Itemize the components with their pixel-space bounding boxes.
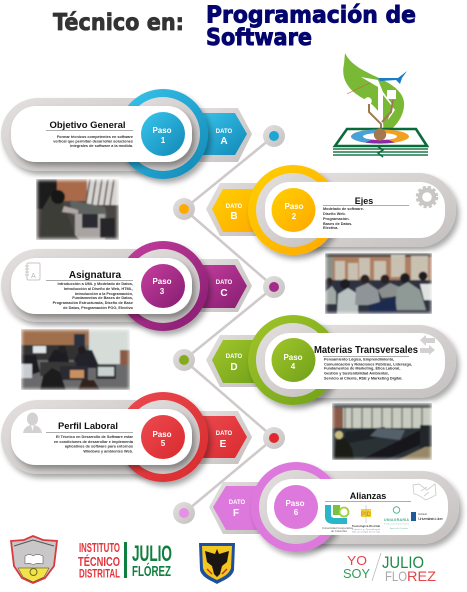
data tag F: DATO (229, 500, 246, 506)
heading and text: Formar técnicos competentes en software (57, 135, 133, 139)
heading and text: Bases de Datos. (323, 222, 352, 226)
panel: Paso 4 Materias Transversales (206, 315, 456, 405)
logo: Universitaria Lúker: Universitaria Lúker (418, 516, 444, 521)
logo: Instituto Técnico Distrital Julio Flórez (78, 540, 172, 580)
node B (173, 198, 195, 220)
node D (173, 349, 195, 371)
logo: Universidad Cooperativa: de Colombia (331, 529, 347, 533)
step circle 2: Paso (284, 202, 304, 211)
panel: Paso 1 Objetivo General (1, 89, 252, 179)
photo: classroom with curtains (332, 403, 432, 460)
step circle 1: 1 (161, 136, 166, 145)
data tag E: E (220, 439, 227, 450)
photo 2 soft edge (325, 253, 432, 314)
data tag C: DATO (216, 280, 233, 286)
panel: Paso 6 Alianzas (209, 462, 459, 552)
data tag C (195, 259, 252, 312)
heading (325, 491, 411, 502)
heading and text: Asignatura (69, 270, 122, 281)
data tag D (206, 335, 265, 387)
heading and text: Perfil Laboral (58, 421, 118, 431)
logo: Yo soy Julio Flórez: SOY (343, 566, 370, 581)
heading and text: Electiva. (323, 226, 338, 230)
logo: Instituto Técnico Distrital Julio Flórez: INSTITUTO (79, 540, 120, 555)
panel: Paso 2 Ejes (206, 165, 456, 255)
heading and text: aplicativos de software para entornos (65, 444, 133, 448)
logo: PID (352, 505, 381, 534)
panel: Paso 5 Perfil Laboral (1, 392, 252, 482)
heading and text (46, 270, 134, 310)
logo: Universidad Cooperativa (322, 505, 353, 533)
heading and text: en condiciones de desarrollar e implementa (54, 440, 134, 444)
data tag E (195, 411, 252, 464)
logo: Yo soy Julio Flórez (343, 553, 436, 584)
title: Programación de Software (206, 0, 416, 51)
heading and text (46, 120, 133, 148)
heading and text: Objetivo General (50, 120, 126, 130)
step circle 3 (141, 264, 185, 308)
heading and text: vertical que permitan desarrollar soluciones (53, 140, 133, 144)
step circle 6: Paso (285, 499, 305, 508)
node A (263, 125, 285, 147)
logo: PID: PID (361, 512, 372, 518)
step circle 6 (274, 485, 318, 529)
heading and text: Diseño Web. (323, 212, 346, 216)
node F (173, 502, 195, 524)
heading: Alianzas (350, 491, 386, 501)
data tag B: B (230, 211, 238, 222)
heading and text: Programación. (323, 217, 350, 221)
logo: Bogotá coat of arms (199, 543, 235, 584)
logo: Instituto Técnico Distrital Julio Flórez: JULIO (132, 541, 172, 566)
connector lines between nodes (184, 136, 274, 513)
logo: Yo soy Julio Flórez: YO (347, 553, 367, 568)
icon: gear (417, 187, 437, 207)
title: Programación de Software: Programación de (206, 0, 416, 28)
photo 1 soft edge (36, 179, 119, 240)
heading and text: Ejes (355, 196, 373, 206)
heading and text: Pensamiento Lógico, Emprendimiento, (324, 358, 394, 362)
title: Técnico en: Técnico en: (53, 10, 184, 36)
step circle 4: 4 (291, 362, 296, 371)
heading and text: Modelado de software. (323, 207, 364, 211)
icon: handshake (413, 484, 436, 500)
node C (263, 276, 285, 298)
logo: Instituto Técnico Distrital Julio Flórez: DISTRITAL (79, 566, 120, 580)
heading and text: Introducción a UML y Modelado de Datos, (58, 282, 133, 286)
step circle 2 (272, 188, 316, 232)
step circle 6: 6 (294, 508, 299, 517)
step circle 3: Paso (152, 277, 172, 286)
logo: Instituto Técnico Distrital Julio Flórez: FLÓREZ (132, 562, 171, 580)
icon: notebook (25, 263, 40, 280)
step circle 5: 5 (161, 439, 166, 448)
heading and text: Fundamentos de Bases de Datos, (72, 296, 133, 300)
logo: Universidad Cooperativa: Universidad Cooperativa (322, 526, 353, 530)
data tag B (206, 183, 265, 236)
heading and text (323, 196, 409, 230)
icon: arrows (420, 335, 435, 355)
data tag E: DATO (216, 431, 233, 437)
data tag B: DATO (226, 204, 243, 210)
logo: PID: Universidad Distrital (352, 530, 380, 534)
heading and text: de Datos, Programación POO, Electivo (63, 306, 134, 310)
heading and text: Windows y ambientes Web. (83, 450, 133, 454)
data tag D: DATO (226, 354, 243, 360)
heading and text: Programación Estructurada, Diseño de Base (53, 301, 133, 305)
panel: Paso 3 Asignatura (1, 241, 252, 331)
logo: Instituto Técnico Distrital Julio Flórez: TÉCNICO (78, 554, 120, 569)
step circle 4: Paso (283, 353, 303, 362)
heading and text: Gestión y Sostenibilidad Ambiental, (324, 372, 389, 376)
heading and text: Comunicación y Relaciones Públicas, Liderazgo, (324, 362, 412, 366)
heading and text: Introducción al Diseño de Web, HTML, (64, 287, 133, 291)
heading and text: Materias Transversales (314, 345, 418, 356)
step circle 4 (272, 338, 316, 382)
data tag F: F (233, 508, 239, 519)
step circle 1 (141, 112, 185, 156)
data tag F (209, 482, 268, 534)
logo: Yo soy Julio Flórez: FLO (385, 568, 407, 584)
photo: student at computer (36, 179, 119, 240)
heading and text (314, 345, 418, 380)
logo: Uniagraria: Fundación Universitaria (384, 522, 410, 526)
logo: Yo soy Julio Flórez: JULIO (382, 553, 424, 572)
logo: leaf, USB tree and banknote (333, 53, 428, 157)
logo: Universitaria Lúker (411, 512, 444, 521)
logo: Universitaria Lúker: Instituto (418, 512, 428, 516)
photo 4 soft edge (332, 403, 432, 460)
logo: Uniagraria: Agraria de Colombia (390, 527, 409, 530)
heading and text: Fundamentos de Marketing, Ética Laboral, (324, 366, 400, 370)
step circle 5: Paso (152, 430, 172, 439)
heading and text: Servicio al Cliente, RSE y Marketing Digital. (324, 376, 402, 380)
photo: students in classroom (325, 253, 432, 314)
photo: computer lab (21, 329, 130, 390)
data tag C: C (220, 288, 228, 299)
logo: Uniagraria: UNIAGRARIA (384, 518, 409, 522)
title: Programación de Software: Software (206, 23, 312, 51)
heading and text: integrales de software a la medida. (70, 144, 133, 148)
step circle 2: 2 (292, 212, 297, 221)
node E (263, 427, 285, 449)
data tag A (195, 108, 252, 162)
logo: PID: Tecnológica Distrital (352, 524, 380, 528)
logo: PID: Ciencia y Tecnología (352, 529, 381, 531)
photo 3 soft edge (21, 329, 130, 390)
heading and text: Introducción a la Programación, (75, 292, 133, 296)
heading and text: El Técnico en Desarrollo de Software estar (56, 435, 134, 439)
step circle 5 (141, 415, 185, 459)
logo: school shield (11, 536, 57, 583)
icon: notebook: A (31, 273, 36, 280)
icon: person (23, 412, 42, 433)
logo: Yo soy Julio Flórez: REZ (407, 568, 436, 584)
data tag A: A (220, 136, 228, 147)
logo: Uniagraria (384, 507, 410, 530)
data tag D: D (230, 362, 238, 373)
heading and text (46, 421, 134, 454)
step circle 1: Paso (152, 126, 172, 135)
step circle 3: 3 (160, 287, 165, 296)
data tag A: DATO (216, 129, 233, 135)
